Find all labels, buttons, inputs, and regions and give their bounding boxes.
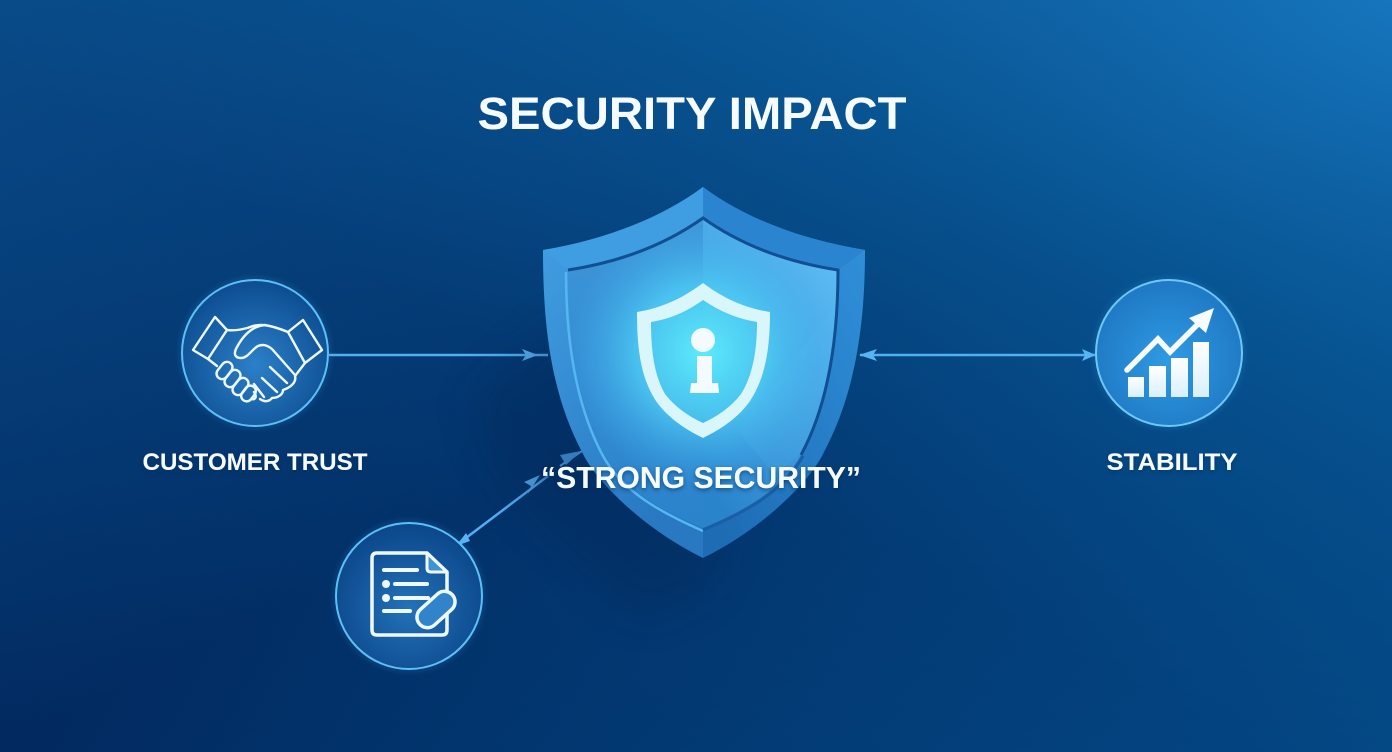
shield face — [586, 220, 836, 528]
arrow: customer trust to shield — [329, 349, 548, 361]
inner shield emblem — [637, 283, 770, 438]
arrow: compliance to shield — [456, 451, 582, 546]
shield outer rim — [543, 187, 865, 558]
icon: handshake — [193, 317, 322, 404]
shield drop shadow — [470, 320, 740, 620]
label: stability: STABILITY — [1106, 449, 1238, 476]
arrow: shield to stability — [859, 349, 1096, 361]
label: customer trust: CUSTOMER TRUST — [142, 449, 368, 476]
icon circle: compliance — [332, 519, 486, 673]
text: strong security: “STRONG SECURITY” — [541, 460, 861, 495]
icon: document with pencil — [372, 553, 459, 635]
keyhole icon — [690, 328, 719, 393]
shield inner edge — [566, 218, 838, 531]
title: SECURITY IMPACT — [478, 88, 906, 139]
shield — [543, 187, 865, 558]
icon: growth chart — [1127, 308, 1214, 397]
icon circle: stability — [1092, 276, 1246, 430]
icon circle: customer trust — [178, 276, 332, 430]
